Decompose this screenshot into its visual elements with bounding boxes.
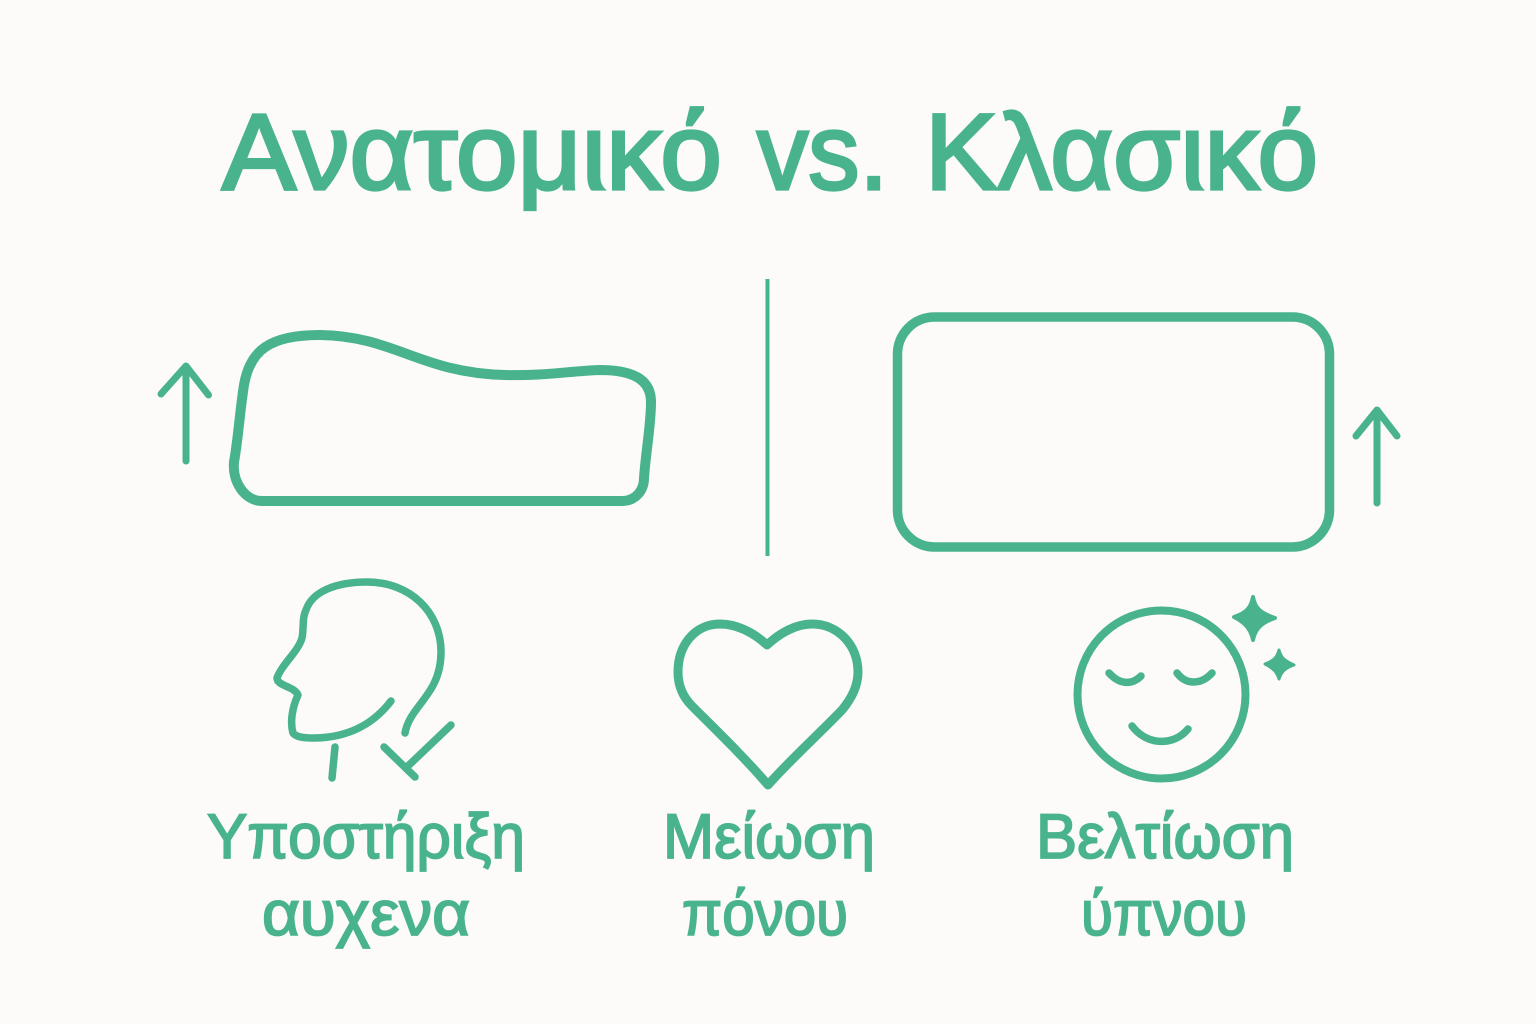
label: neck support: αυχενα [262, 879, 470, 949]
divider [766, 279, 770, 556]
title: Ανατομικό [222, 91, 722, 212]
title [222, 91, 1318, 212]
arrow: anatomical pillow height [161, 366, 208, 461]
label: neck support [207, 802, 525, 949]
label: pain reduction: πόνου [682, 879, 848, 949]
label: better sleep: Βελτίωση [1036, 802, 1294, 872]
label: pain reduction: Μείωση [663, 802, 875, 872]
classic pillow outline [898, 317, 1330, 547]
title: Κλασικό [925, 91, 1318, 212]
anatomical pillow outline [234, 335, 651, 501]
icon: head and neck [277, 582, 451, 778]
label: neck support: Υποστήριξη [207, 802, 525, 872]
icon: heart [678, 624, 858, 785]
icon: smiling sleeping face [1078, 597, 1294, 778]
label: pain reduction [663, 802, 875, 949]
label: better sleep [1036, 802, 1294, 949]
title: vs. [757, 91, 888, 212]
label: better sleep: ύπνου [1081, 879, 1247, 949]
arrow: classic pillow height [1356, 410, 1397, 503]
